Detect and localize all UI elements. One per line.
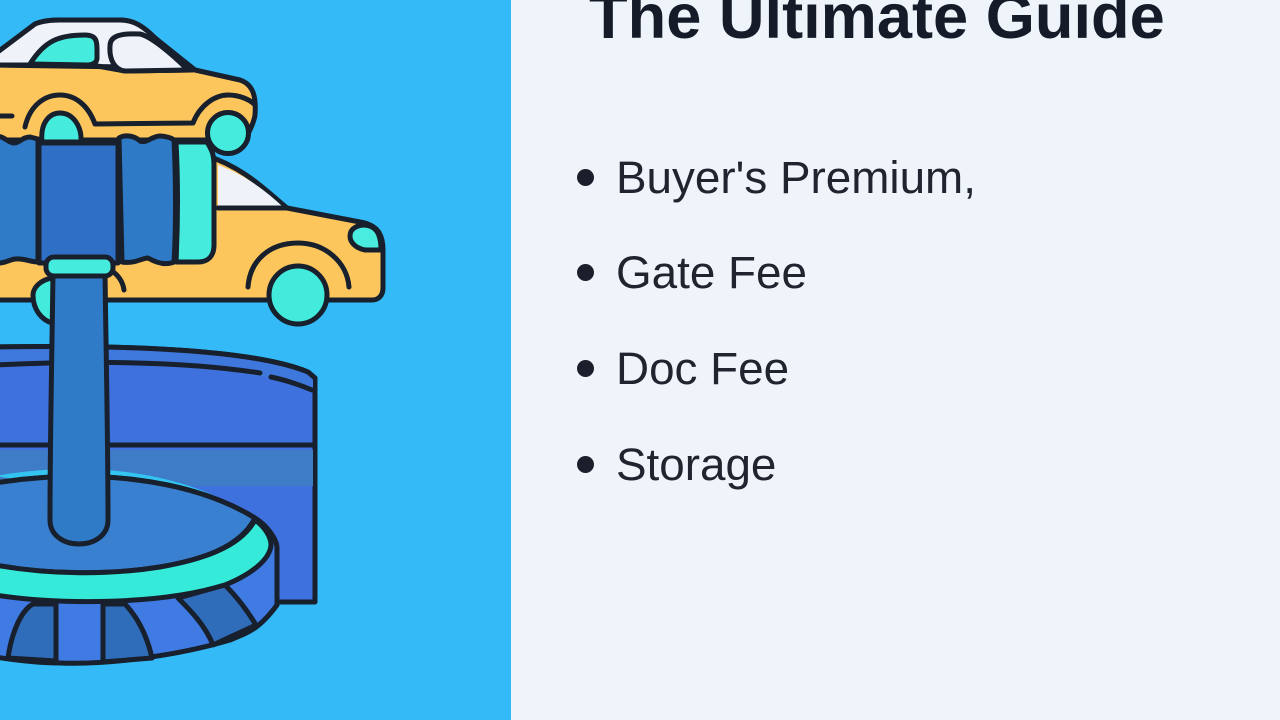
panel: illustration bbox=[0, 0, 511, 720]
bullet list bbox=[577, 152, 976, 490]
list item: Storage: Storage bbox=[616, 439, 776, 490]
list item: Gate Fee: Gate Fee bbox=[616, 247, 807, 298]
list item: Buyer's Premium: Buyer's Premium, bbox=[616, 152, 976, 203]
icon: front yellow car bbox=[0, 20, 255, 142]
icon: front car rear wheel bbox=[208, 112, 248, 154]
icon: gavel head bbox=[0, 136, 214, 264]
icon: auction block bbox=[0, 346, 315, 663]
list item: Doc Fee: Doc Fee bbox=[616, 343, 789, 394]
icon: gavel handle bbox=[46, 257, 113, 544]
illustration: cars and auction gavel bbox=[0, 18, 386, 666]
icon: rear yellow car bbox=[0, 155, 383, 324]
